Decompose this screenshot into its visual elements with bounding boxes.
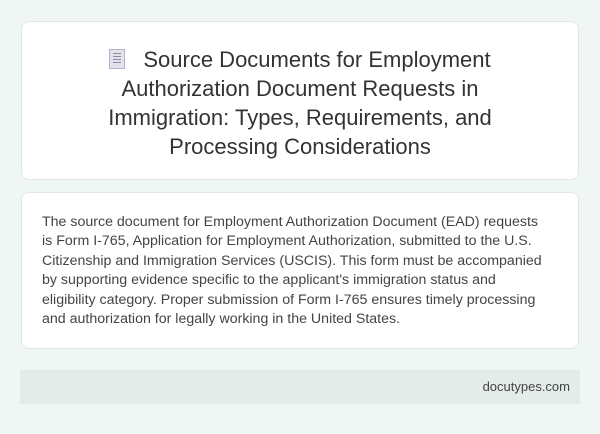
title: Authorization Document Requests in: [121, 76, 479, 101]
text block: by supporting evidence specific to the applicant's immigration status and: [42, 272, 496, 288]
footer: [20, 370, 580, 404]
icon: document: [109, 49, 125, 69]
text block: eligibility category. Proper submission of Form I-765 ensures timely processing: [42, 292, 535, 308]
text block: is Form I-765, Application for Employment Authorization, submitted to the U.S.: [42, 233, 532, 249]
title: [108, 47, 492, 159]
text block: The source document for Employment Authorization Document (EAD) requests: [42, 214, 538, 230]
text block: [42, 214, 542, 327]
footer text: docutypes.com: [483, 379, 570, 394]
panel: description: [21, 192, 579, 349]
text block: and authorization for legally working in the United States.: [42, 311, 400, 327]
title: Immigration: Types, Requirements, and: [108, 105, 492, 130]
title: Source Documents for Employment: [143, 47, 491, 72]
panel: title card: [21, 21, 579, 180]
text block: Citizenship and Immigration Services (USCIS). This form must be accompanied: [42, 253, 542, 269]
title: Processing Considerations: [169, 134, 431, 159]
